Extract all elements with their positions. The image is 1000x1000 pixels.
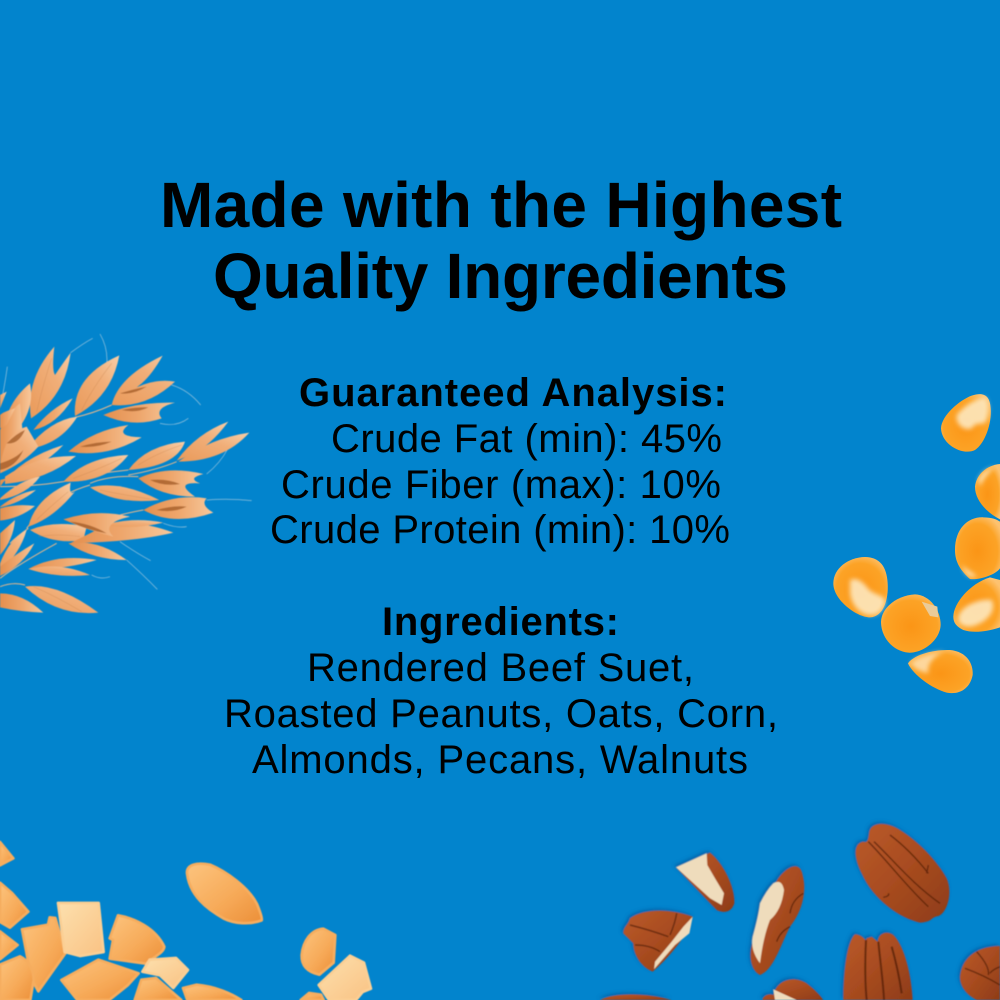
corn kernel: bottom [908,650,973,693]
text block: ingredients: Almonds, Pecans, Walnuts [252,738,748,782]
title: Made with the Highest [160,169,842,241]
text block: guaranteed analysis [270,371,730,552]
illustration: oat sprig [0,334,252,613]
pecan: bottom left sliver [600,994,672,1000]
corn kernel: left [833,557,888,617]
corn kernel: right upper [975,464,1000,519]
title: Quality Ingredients [213,240,788,312]
pecan: bottom whole [843,933,913,1000]
illustration: pecans [600,824,1000,1000]
text block: guaranteed analysis: Crude Fat (min): 45% [331,417,722,461]
pecan: left chunk [623,911,693,972]
illustration: corn kernels [833,394,1000,693]
text block: ingredients: Rendered Beef Suet, [307,646,694,690]
pecan: broken piece with pale face [676,853,734,912]
corn kernel: right lower [953,577,1000,632]
pecan: centre half [751,866,804,975]
pecan: whole top right [856,824,949,923]
text block: ingredients: Roasted Peanuts, Oats, Corn, [224,692,778,736]
title [160,169,842,312]
text block: guaranteed analysis: Crude Protein (min): 10% [270,508,730,552]
text block: guaranteed analysis: Crude Fiber (max): 10% [281,463,721,507]
peanut: whole half [187,864,262,923]
corn kernel: centre [881,594,941,653]
text block: ingredients [224,600,778,782]
text block: ingredients: Ingredients: [382,600,619,644]
pecan: bottom right [960,946,1000,1000]
pecan: bottom centre fragment [762,979,823,1000]
text block: guaranteed analysis: Guaranteed Analysis: [299,371,727,415]
corn kernel: top [941,394,991,452]
corn kernel: right middle [955,517,1000,579]
illustration: peanut pieces [0,842,371,1000]
